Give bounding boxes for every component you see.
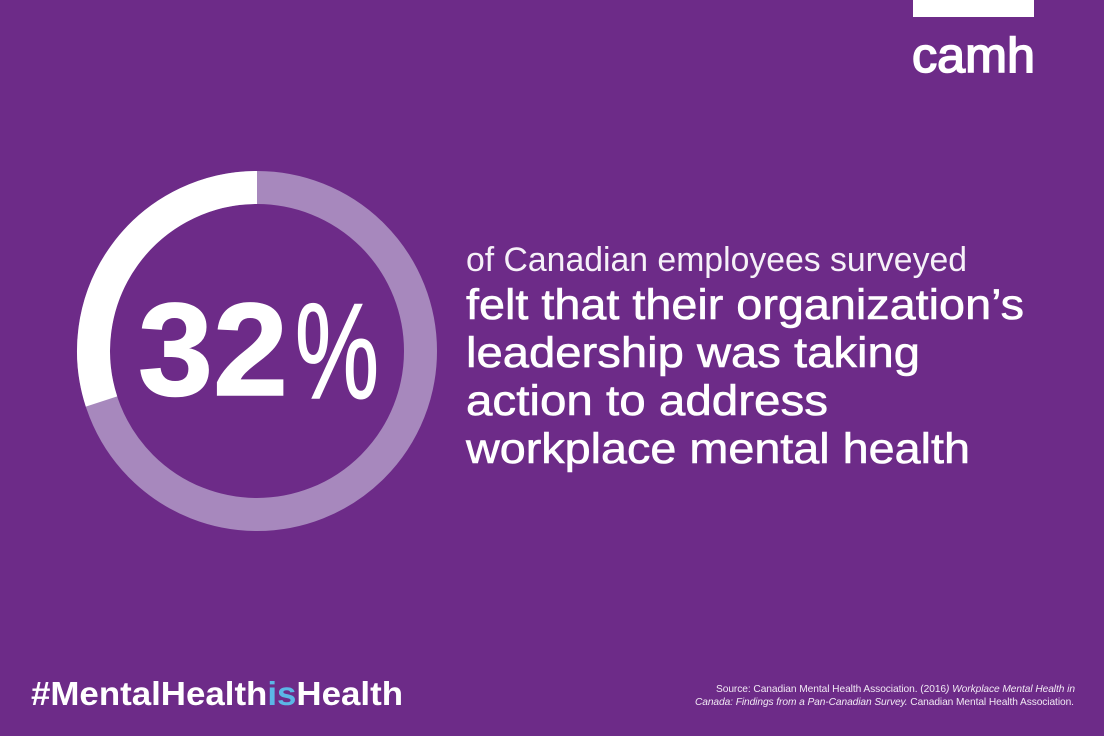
intro line: of Canadian employees surveyed bbox=[466, 241, 967, 279]
emphasis text: leadership was taking bbox=[466, 329, 920, 377]
hashtag: #MentalHealth isHealth bbox=[31, 675, 403, 712]
statistic: 32%: % bbox=[295, 275, 379, 427]
statistic: 32%: 32 bbox=[138, 276, 288, 423]
emphasis text: felt that their organization’s bbox=[466, 281, 1024, 329]
emphasis text: workplace mental health bbox=[465, 425, 970, 473]
source citation bbox=[695, 684, 1075, 708]
statement text bbox=[465, 241, 1024, 473]
donut chart: 32% bbox=[94, 188, 420, 514]
logo: camh bbox=[912, 0, 1035, 83]
source citation: Source: Canadian Mental Health Association. (2016) Workplace Mental Health in bbox=[716, 684, 1075, 695]
emphasis text bbox=[465, 281, 1024, 473]
emphasis text: action to address bbox=[466, 377, 828, 425]
statistic: 32% bbox=[138, 275, 379, 427]
logo: camh: camh bbox=[912, 29, 1035, 83]
source citation: Canada: Findings from a Pan-Canadian Survey. Canadian Mental Health Association. bbox=[695, 697, 1074, 708]
